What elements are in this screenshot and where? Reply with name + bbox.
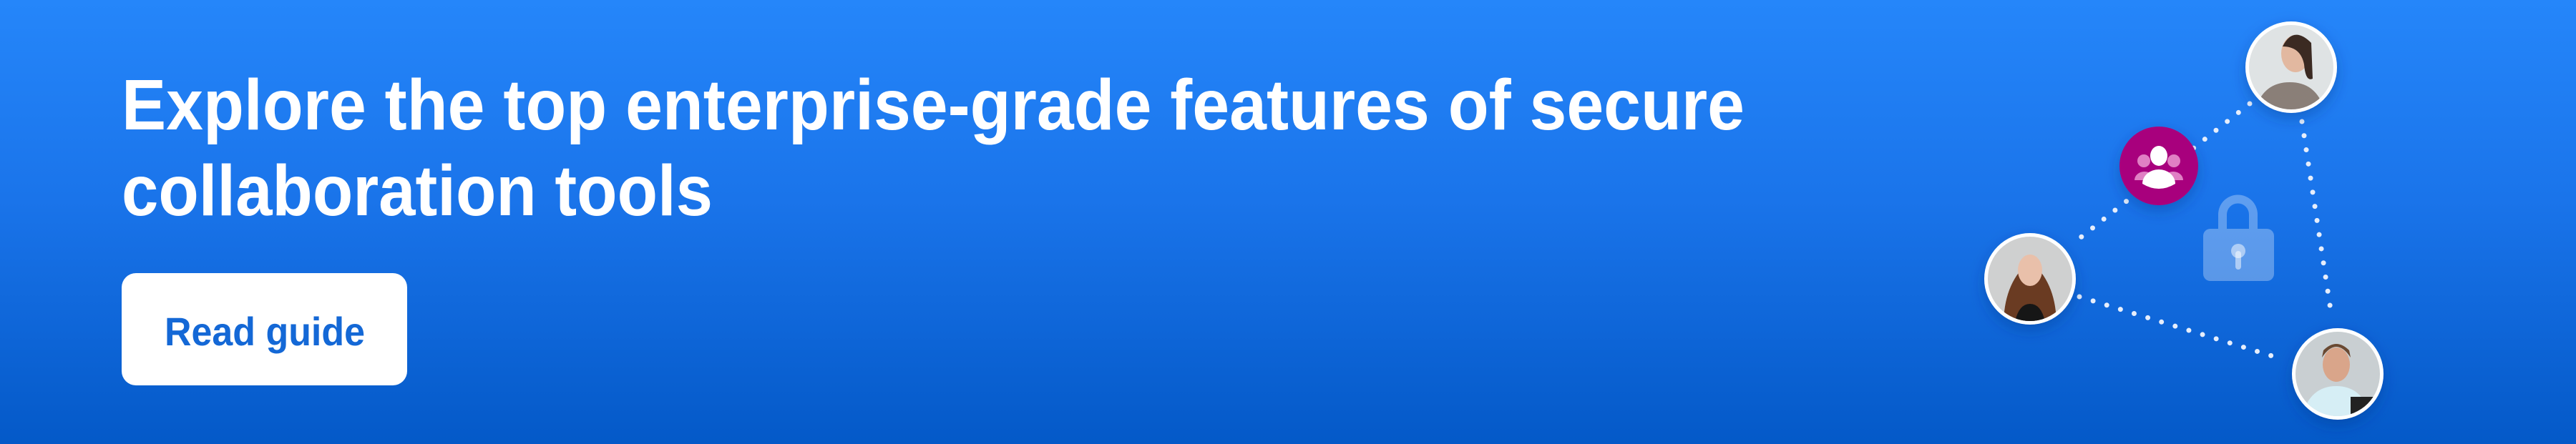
icon: lock	[2203, 194, 2274, 281]
title: Explore the top enterprise-grade features of secure	[122, 65, 1745, 145]
title: collaboration tools	[122, 151, 713, 231]
button: Read guide: Read guide	[165, 309, 365, 354]
dotted connectors	[2071, 104, 2332, 360]
button: Read guide	[122, 273, 407, 385]
title	[122, 65, 1745, 231]
avatar: woman left	[1984, 232, 2079, 325]
avatar: woman top	[2245, 21, 2340, 114]
avatar: man	[2292, 327, 2386, 422]
icon: group (magenta)	[2119, 127, 2198, 205]
